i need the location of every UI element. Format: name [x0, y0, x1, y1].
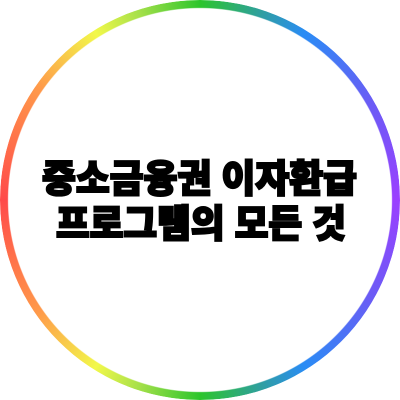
title line 2: 프로그램의 모든 것	[56, 204, 346, 246]
title line 1: 중소금융권 이자환급	[42, 159, 357, 201]
